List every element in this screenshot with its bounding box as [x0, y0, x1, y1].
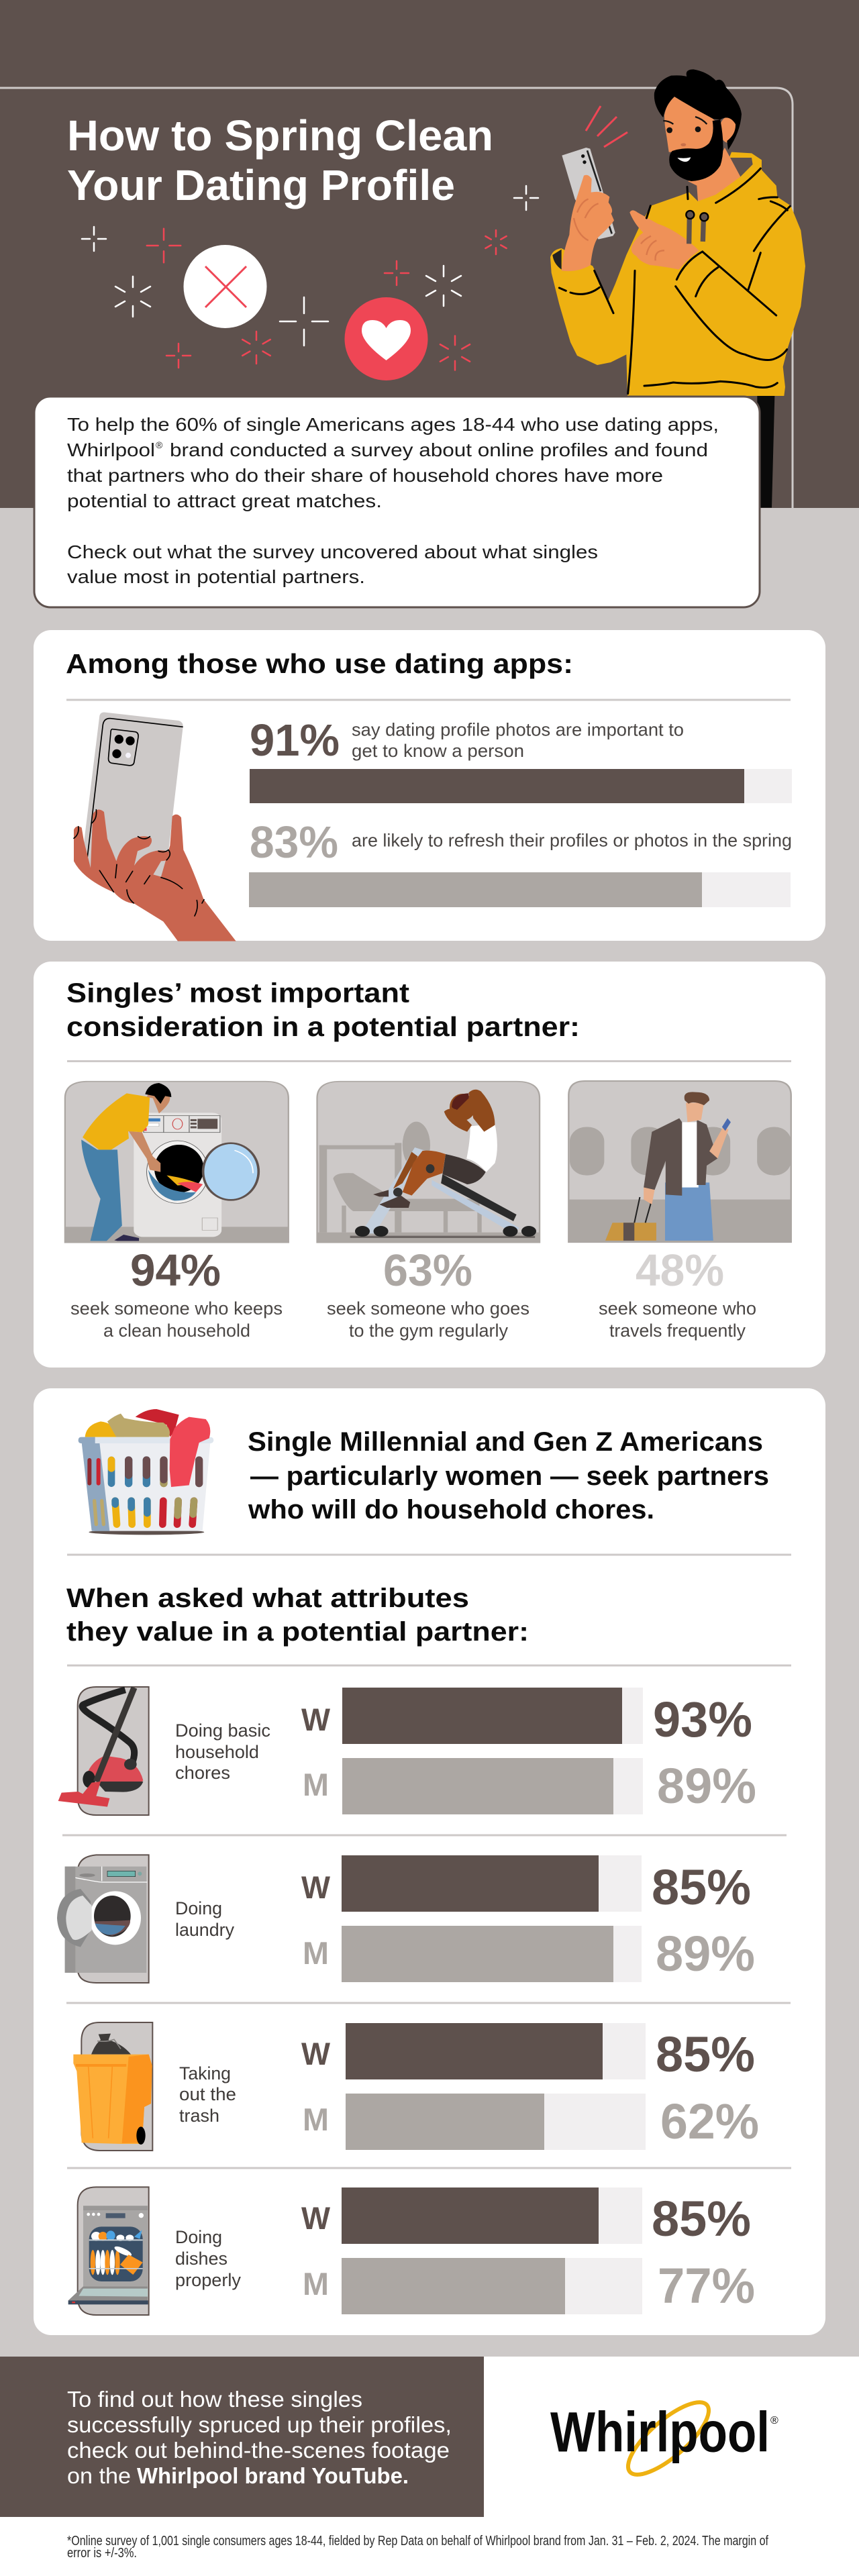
heading: millennial and gen z: Single Millennial and Gen Z Americans — [248, 1427, 763, 1457]
stat: 48% travels — [599, 1245, 756, 1341]
heading: attributes: When asked what attributes — [66, 1584, 469, 1613]
heading: Singles’ most important — [66, 978, 409, 1009]
stat: 91%: 91% — [250, 715, 340, 766]
bar: women 85%: 85% — [656, 2026, 755, 2082]
label — [179, 2063, 236, 2126]
icon: washing machine — [57, 1855, 149, 1983]
label — [175, 2227, 242, 2290]
label: trash — [179, 2106, 219, 2126]
illustration: traveller with suitcase — [568, 1081, 791, 1242]
icon: rejected X circle — [184, 245, 267, 328]
row: doing dishes properly — [68, 2187, 755, 2315]
panel: intro: brand conducted a survey about online profiles and found — [170, 440, 708, 460]
panel: dating apps stats — [34, 630, 825, 941]
bar: men 77% — [303, 2258, 755, 2314]
panel: household chores attributes — [34, 1388, 825, 2335]
stat: 48% travels: seek someone who — [599, 1298, 756, 1319]
icon: trash bin — [73, 2022, 152, 2151]
footer white area — [0, 2357, 859, 2576]
illustration: man at gym — [317, 1082, 540, 1243]
heading: millennial and gen z — [248, 1427, 769, 1525]
bar: women 85% — [301, 2187, 751, 2247]
panel: intro: ® — [156, 440, 163, 450]
bar: women 85%: 85% — [652, 2191, 751, 2247]
stat: 91% — [250, 715, 684, 766]
stat: 63% goes to gym: seek someone who goes — [327, 1298, 529, 1319]
stat: 83%: are likely to refresh their profiles or photos in the spring — [352, 831, 792, 851]
bar: women 85%: W — [301, 1869, 331, 1905]
label: Doing — [175, 2227, 222, 2247]
label: properly — [175, 2270, 242, 2290]
panel: intro — [34, 397, 760, 607]
panel: call to action: successfully spruced up their profiles, — [67, 2412, 452, 2437]
bar: men 89% — [303, 1926, 755, 1982]
panel: call to action: To find out how these singles — [67, 2387, 362, 2412]
illustration: man loading washer — [65, 1082, 289, 1243]
title: How to Spring Clean — [67, 111, 493, 160]
stat: 63% goes to gym: to the gym regularly — [349, 1321, 508, 1341]
panel: most important consideration — [34, 962, 825, 1368]
heading: millennial and gen z: who will do household chores. — [248, 1495, 654, 1525]
label — [175, 1898, 234, 1940]
label: Doing — [175, 1898, 222, 1918]
panel: intro: To help the 60% of single Americans ages 18-44 who use dating apps, — [67, 414, 719, 435]
illustration: man with phone — [550, 69, 805, 508]
panel: intro: Check out what the survey uncovered about what singles — [67, 542, 598, 562]
icons: sparkles — [82, 186, 538, 370]
header band — [0, 0, 859, 508]
bar: women 85% — [301, 2023, 755, 2082]
footnote: error is +/-3%. — [67, 2546, 137, 2561]
panel: call to action — [0, 2357, 484, 2517]
stat: 94% keeps clean household: 94% — [130, 1245, 221, 1296]
icon: vacuum — [58, 1687, 149, 1815]
stat: 63% goes to gym: 63% — [383, 1245, 472, 1296]
logo: Whirlpool: Whirlpool — [550, 2401, 770, 2464]
panel: call to action: Whirlpool brand YouTube. — [137, 2463, 409, 2488]
label: dishes — [175, 2249, 228, 2269]
stat: 94% keeps clean household — [70, 1245, 283, 1341]
stat: 48% travels: travels frequently — [609, 1321, 746, 1341]
label — [175, 1720, 270, 1783]
icon: dishwasher — [68, 2187, 149, 2315]
footnote — [67, 2534, 768, 2561]
logo: Whirlpool — [550, 2391, 778, 2485]
bar: men 89% — [303, 1758, 756, 1814]
heading: attributes — [66, 1584, 529, 1647]
bar: men 62% — [303, 2094, 759, 2150]
title — [67, 111, 493, 209]
row: doing laundry — [57, 1855, 755, 1983]
panel: intro: potential to attract great matches. — [67, 491, 382, 511]
icon: heart circle — [345, 297, 428, 380]
bar: 83% — [249, 872, 791, 907]
row: basic household chores — [58, 1687, 756, 1815]
row: taking out the trash — [73, 2022, 759, 2151]
panel: intro: value most in potential partners. — [67, 566, 365, 587]
stat: 83% — [250, 817, 792, 868]
icon: phone signal lines — [586, 106, 627, 147]
heading: Among those who use dating apps: — [66, 648, 573, 679]
bar: men 89%: 89% — [656, 1926, 755, 1981]
heading: millennial and gen z: — particularly women — seek partners — [250, 1461, 769, 1491]
panel: intro: Whirlpool — [67, 440, 155, 460]
stat: 94% keeps clean household: a clean household — [103, 1321, 250, 1341]
heading: attributes: they value in a potential partner: — [66, 1617, 529, 1647]
label: laundry — [175, 1920, 234, 1940]
bar: 91% — [250, 769, 792, 803]
bar: women 85%: W — [301, 2036, 331, 2071]
bar: men 89%: 89% — [657, 1758, 756, 1814]
bar: women 85% — [301, 1855, 751, 1915]
label: Doing basic — [175, 1720, 270, 1741]
stat: 63% goes to gym — [327, 1245, 529, 1341]
bar: men 62%: 62% — [660, 2094, 759, 2149]
heading: consideration in a potential partner: — [66, 1011, 580, 1042]
bar: women 85%: W — [301, 2200, 331, 2236]
bar: women 93%: 93% — [653, 1692, 752, 1747]
stat: 83%: 83% — [250, 817, 338, 868]
bar: women 93%: W — [301, 1702, 331, 1737]
bar: women 93% — [301, 1688, 752, 1747]
stat: 91%: say dating profile photos are important to — [352, 719, 684, 739]
label: chores — [175, 1763, 230, 1783]
bar: women 85%: 85% — [652, 1859, 751, 1915]
bar: men 89%: M — [303, 1935, 329, 1971]
title: Your Dating Profile — [67, 161, 455, 209]
illustration: hand holding phone — [74, 713, 236, 941]
stat: 91%: get to know a person — [352, 741, 524, 761]
label: household — [175, 1742, 259, 1762]
icon: laundry basket — [79, 1409, 213, 1535]
stat: 94% keeps clean household: seek someone who keeps — [70, 1298, 283, 1319]
label: Taking — [179, 2063, 231, 2083]
label: out the — [179, 2084, 236, 2104]
panel: call to action: check out behind-the-scenes footage — [67, 2438, 450, 2463]
heading — [66, 978, 580, 1042]
bar: men 77%: 77% — [658, 2258, 755, 2314]
logo: Whirlpool: ® — [770, 2415, 778, 2426]
bar: men 77%: M — [303, 2266, 329, 2302]
bar: men 62%: M — [303, 2102, 329, 2137]
stat: 48% travels: 48% — [636, 1245, 724, 1296]
panel: call to action: on the — [67, 2463, 131, 2488]
bar: men 89%: M — [303, 1767, 329, 1802]
panel: intro: that partners who do their share of household chores have more — [67, 465, 663, 486]
